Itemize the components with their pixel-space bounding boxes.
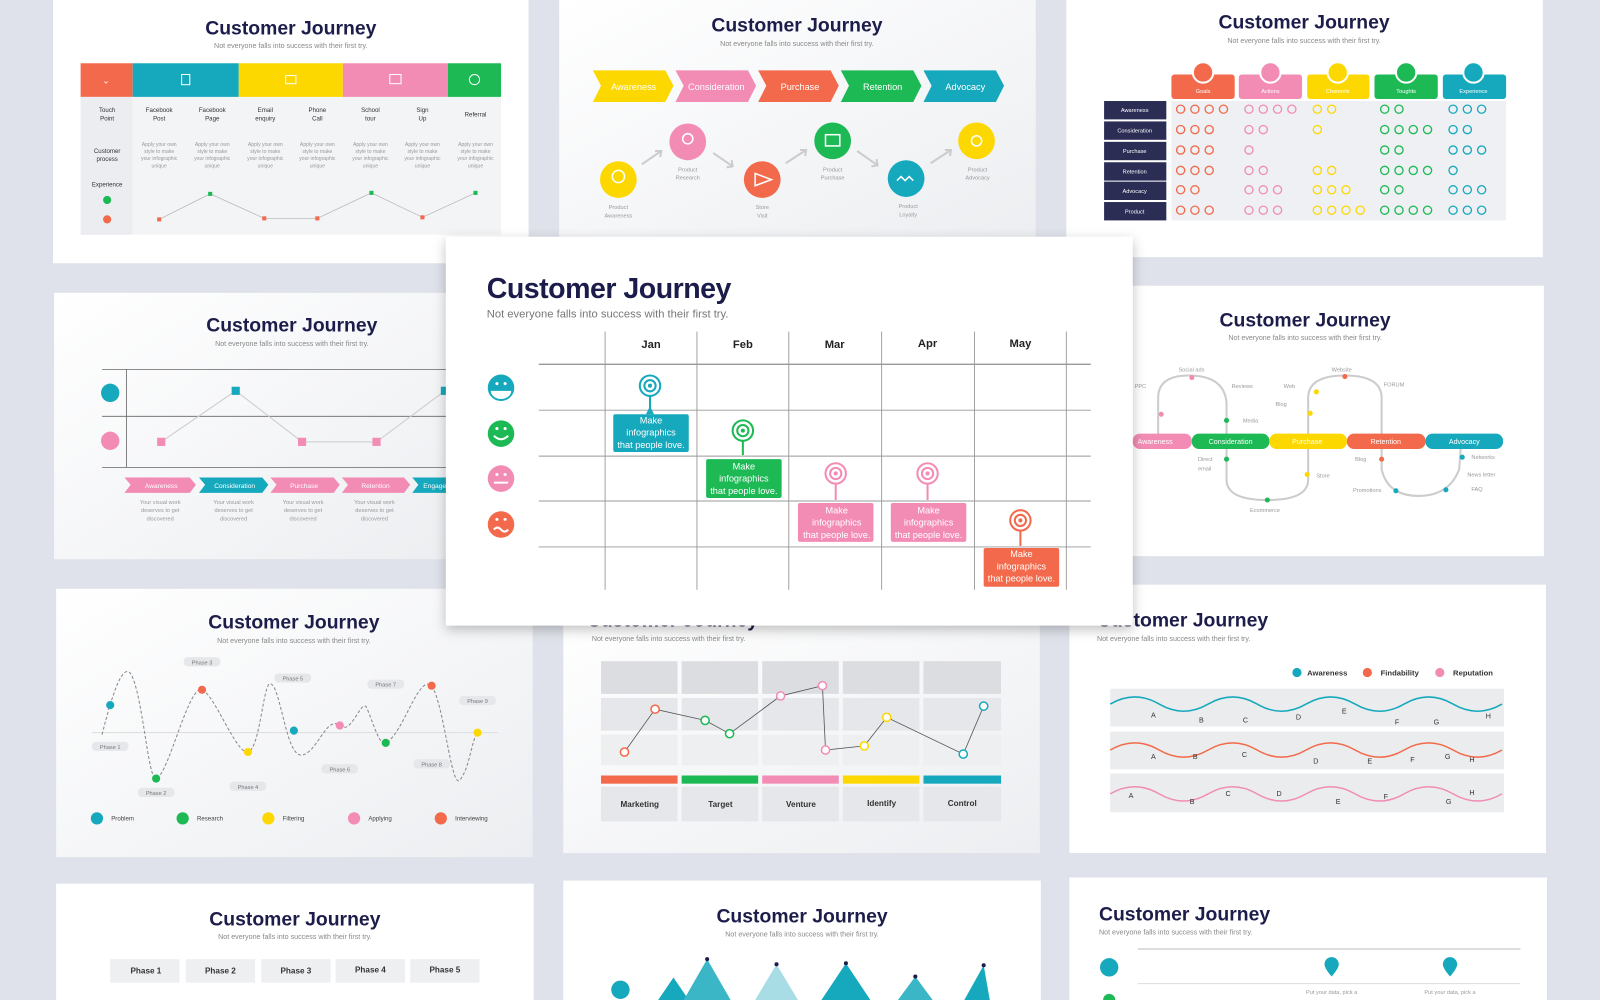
bands: B <box>1199 716 1204 724</box>
slide: smiley line chart: Customer Journey <box>206 315 378 337</box>
slide: loop timeline: Website <box>1332 367 1352 373</box>
callouts: infographics <box>997 561 1047 571</box>
bands: H <box>1486 712 1491 720</box>
slide: loop timeline: Networks <box>1471 455 1495 461</box>
slide: smiley line chart: discovered <box>147 516 174 522</box>
row labels: Phone <box>309 107 327 114</box>
row labels <box>1104 101 1166 220</box>
callouts: that people love. <box>988 574 1055 584</box>
slide: phases bottom left: Phase 2 <box>205 966 236 975</box>
slide: table touch points: unique <box>258 163 273 169</box>
month labels: May <box>1009 338 1032 350</box>
category labels <box>601 776 1001 821</box>
slide: pins bottom right: Put your data, pick a <box>1306 990 1358 996</box>
bands: G <box>1446 798 1452 806</box>
slide: table touch points: Apply your own <box>248 142 283 148</box>
step circles: Purchase <box>821 176 845 182</box>
slide: table touch points: your infographic <box>404 156 441 162</box>
bands: F <box>1395 718 1400 726</box>
chevrons: Purchase <box>290 483 318 490</box>
slide: phases bottom left: Not everyone falls into success with their first try. <box>218 933 372 941</box>
slide: smiley line chart: discovered <box>361 516 388 522</box>
bands: E <box>1367 757 1372 765</box>
callouts: Make <box>917 505 940 515</box>
slide: phases bottom left: Phase 5 <box>429 965 461 974</box>
slide: matrix of circles <box>1066 0 1543 257</box>
bands: G <box>1434 718 1440 726</box>
experience line chart <box>103 191 478 223</box>
slide: loop timeline: Social ads <box>1179 367 1205 373</box>
bands <box>1110 689 1504 812</box>
slide: phase wave: Phase 3 <box>192 660 212 666</box>
slide: table touch points <box>53 0 529 263</box>
slide: phases bottom left: Phase 1 <box>130 966 162 975</box>
legend: Applying <box>368 815 392 822</box>
step circles: Advocacy <box>965 176 990 182</box>
category labels: Control <box>948 799 977 808</box>
callouts: infographics <box>812 518 862 528</box>
slide: phase wave: Phase 4 <box>238 785 258 791</box>
column headers: Actions <box>1261 89 1280 95</box>
bands: B <box>1193 753 1198 761</box>
step circles: Visit <box>757 213 768 219</box>
callouts: that people love. <box>617 440 685 450</box>
header colour bar <box>81 63 501 97</box>
slide: loop timeline: PPC <box>1135 384 1146 390</box>
chevrons: Consideration <box>214 483 255 490</box>
slide: phases bottom left: Phase 3 <box>280 966 312 975</box>
step circles: Product <box>823 167 843 173</box>
month labels: Mar <box>825 339 845 351</box>
timeline bar: Purchase <box>1292 438 1322 446</box>
month labels: Apr <box>918 338 938 350</box>
row labels: Purchase <box>1123 149 1147 155</box>
slide: triangles bottom middle: Not everyone falls into success with their first try. <box>725 931 879 939</box>
slide: smiley line chart: discovered <box>220 516 247 522</box>
row labels: process <box>96 156 118 163</box>
slide: chevron process: Customer Journey <box>711 15 883 37</box>
slide: smiley line chart: deserves to get <box>214 508 253 514</box>
row labels: Experience <box>92 182 123 189</box>
slide: chevron process <box>559 0 1036 237</box>
bands: D <box>1277 790 1282 798</box>
step circles <box>600 122 995 219</box>
bands: A <box>1129 792 1134 800</box>
wave <box>102 671 478 781</box>
slide: table touch points: Not everyone falls into success with their first try. <box>214 42 368 50</box>
slide: phase wave: Phase 8 <box>421 762 442 768</box>
bands: C <box>1242 751 1247 759</box>
bands: H <box>1469 756 1475 764</box>
month labels <box>641 338 1032 351</box>
slide: phase wave: Phase 2 <box>146 791 166 797</box>
slide: table touch points: Apply your own <box>300 142 335 148</box>
slide: featured customer journey grid <box>446 237 1133 626</box>
row labels: Facebook <box>199 107 227 114</box>
row labels: Touch <box>99 107 115 114</box>
timeline bar: Advocacy <box>1449 438 1480 446</box>
slide: table touch points: unique <box>152 163 167 169</box>
icon: smileys <box>488 374 514 538</box>
row labels: Email <box>258 107 273 114</box>
month labels: Feb <box>733 339 753 351</box>
smileys <box>101 384 119 402</box>
row labels: Facebook <box>146 107 174 114</box>
slide: smiley line chart: Your visual work <box>354 500 395 506</box>
slide: table touch points: unique <box>468 163 483 169</box>
bands: G <box>1445 753 1451 761</box>
callouts: Make <box>826 505 848 515</box>
callouts: Make <box>733 461 755 471</box>
legend: Filtering <box>283 815 304 822</box>
grid <box>601 661 1001 765</box>
slide: table touch points: style to make <box>461 149 491 155</box>
step circles: Awareness <box>605 213 632 219</box>
slide: smiley line chart <box>54 293 462 559</box>
line with squares <box>157 387 449 446</box>
slide: table touch points: style to make <box>302 149 333 155</box>
row labels: School <box>361 107 380 114</box>
slide: pins bottom right: Not everyone falls into success with their first try. <box>1099 929 1253 937</box>
bands: H <box>1469 789 1475 797</box>
slide: matrix of circles: Not everyone falls into success with their first try. <box>1227 37 1381 45</box>
slide: matrix of circles: Customer Journey <box>1218 12 1390 34</box>
row labels: Page <box>205 115 220 122</box>
callouts <box>613 376 1059 587</box>
slide: phase wave: Phase 9 <box>467 699 488 705</box>
slide: phase wave: Phase 1 <box>100 745 121 751</box>
step circles: Product <box>609 205 628 211</box>
slide: pins bottom right: Put your data, pick a <box>1424 990 1476 996</box>
slide: phase wave: Customer Journey <box>208 612 380 634</box>
slide: grid line chart <box>563 610 1040 853</box>
circle matrix <box>1171 101 1506 220</box>
bands: E <box>1342 707 1347 715</box>
timeline bar <box>1133 434 1503 449</box>
slide: chevron process: Not everyone falls into success with their first try. <box>720 40 874 48</box>
slide: smiley line chart: deserves to get <box>141 508 180 514</box>
row labels: Awareness <box>1121 108 1149 114</box>
chevrons: Retention <box>361 483 390 490</box>
slide: loop timeline: Store <box>1316 474 1330 480</box>
bands: E <box>1336 798 1341 806</box>
legend: Interviewing <box>455 815 488 822</box>
slide: loop timeline: Web <box>1284 384 1295 390</box>
slide: grid line chart: Customer Journey <box>587 610 758 632</box>
slide: phases bottom left: Customer Journey <box>209 909 381 931</box>
slide: pins bottom right <box>1069 878 1547 1000</box>
slide: pins bottom right: Customer Journey <box>1099 903 1270 925</box>
bands: D <box>1313 757 1318 765</box>
slide: table touch points: Apply your own <box>405 142 440 148</box>
category labels: Venture <box>786 800 816 809</box>
slide: table touch points: your infographic <box>457 156 494 162</box>
slide: phases bottom left <box>56 884 534 1000</box>
chevrons: Retention <box>863 82 902 92</box>
chevrons: Awareness <box>611 82 657 92</box>
callouts: that people love. <box>710 486 778 496</box>
callouts: that people love. <box>803 530 870 540</box>
slide: table touch points: unique <box>363 163 378 169</box>
bands: D <box>1296 713 1301 721</box>
slide: loop timeline: Reviews <box>1232 384 1253 390</box>
slide: phase wave: Not everyone falls into success with their first try. <box>217 637 371 645</box>
slide: table touch points: your infographic <box>299 156 336 162</box>
title: Customer Journey <box>205 18 377 40</box>
category labels: Identify <box>867 799 897 808</box>
slide: table touch points: unique <box>205 163 220 169</box>
slide: table touch points: unique <box>310 163 325 169</box>
slide: phase wave: Phase 7 <box>375 683 396 689</box>
loops <box>1158 376 1461 500</box>
slide: smiley line chart: Your visual work <box>283 500 324 506</box>
slide: phase wave <box>56 589 533 857</box>
chevrons: Purchase <box>781 82 819 92</box>
row labels: tour <box>365 115 376 122</box>
bands: A <box>1151 711 1156 719</box>
slide: triangles bottom middle <box>563 881 1041 1000</box>
callouts: that people love. <box>895 530 962 540</box>
slide: table touch points: your infographic <box>141 156 178 162</box>
timeline bar: Retention <box>1370 438 1401 446</box>
slide: table touch points: your infographic <box>247 156 284 162</box>
chevrons <box>593 70 1004 102</box>
step circles: Product <box>898 204 918 210</box>
slide: table touch points: Apply your own <box>353 142 388 148</box>
slide: table touch points: style to make <box>144 149 174 155</box>
legend <box>1292 668 1493 678</box>
callouts: infographics <box>904 518 954 528</box>
row labels: Sign <box>416 107 429 114</box>
column headers: Toughts <box>1396 89 1416 95</box>
row labels: Advocacy <box>1123 189 1147 195</box>
callouts: infographics <box>719 474 769 484</box>
grid lines <box>539 332 1091 590</box>
slide: loop timeline: Not everyone falls into success with their first try. <box>1228 334 1382 342</box>
slide: loop timeline: Promotions <box>1353 488 1382 494</box>
slide: featured customer journey grid: Not everyone falls into success with their first try. <box>487 308 728 320</box>
slide: table touch points: Apply your own <box>142 142 177 148</box>
slide: loop timeline: Blog <box>1355 457 1366 463</box>
chevrons: Consideration <box>688 82 745 92</box>
column headers: Channels <box>1326 89 1350 95</box>
bands: C <box>1243 716 1248 724</box>
slide: smiley line chart: Your visual work <box>213 500 254 506</box>
slide: loop timeline: News letter <box>1467 473 1496 479</box>
bands: F <box>1410 756 1415 764</box>
slide: phases bottom left: Phase 4 <box>355 965 386 974</box>
slide: table touch points: Apply your own <box>458 142 493 148</box>
slide: smiley line chart: Not everyone falls into success with their first try. <box>215 340 369 348</box>
row labels: Call <box>312 115 323 122</box>
chevrons: Engage <box>423 483 446 490</box>
slide: table touch points: your infographic <box>194 156 231 162</box>
step circles: Store <box>756 205 769 211</box>
legend: Findability <box>1381 669 1420 678</box>
row labels: Retention <box>1123 169 1147 175</box>
month labels: Jan <box>641 339 661 351</box>
slide: phase wave: Phase 5 <box>283 677 303 683</box>
timeline bar: Consideration <box>1209 438 1253 446</box>
callouts: infographics <box>626 428 676 438</box>
header colour bar: ⌄ <box>102 76 110 86</box>
slide: wave bands <box>1069 585 1546 853</box>
slide: wave bands: Customer Journey <box>1097 610 1268 632</box>
legend: Research <box>197 815 223 822</box>
step circles: Product <box>678 167 698 173</box>
bands: C <box>1226 790 1231 798</box>
bands: F <box>1384 793 1389 801</box>
row labels: Product <box>1125 209 1145 215</box>
legend <box>91 812 488 824</box>
row labels: Point <box>100 115 114 122</box>
slide: table touch points: style to make <box>197 149 227 155</box>
chevrons: Awareness <box>145 483 178 490</box>
legend: Reputation <box>1453 669 1493 678</box>
row labels <box>92 107 486 189</box>
slide: smiley line chart: Your visual work <box>140 500 181 506</box>
legend: Problem <box>111 815 134 822</box>
slide: triangles bottom middle: Customer Journey <box>716 905 888 927</box>
row labels: Customer <box>94 148 120 155</box>
slide: loop timeline: Direct <box>1198 457 1213 463</box>
slide: loop timeline <box>1122 286 1544 556</box>
bands: A <box>1151 753 1156 761</box>
slide: grid line chart: Not everyone falls into success with their first try. <box>592 635 745 643</box>
slide: smiley line chart: deserves to get <box>284 508 323 514</box>
slide: loop timeline: Media <box>1243 418 1259 424</box>
chevrons: Advocacy <box>945 82 986 92</box>
category labels: Marketing <box>621 800 659 809</box>
line chart <box>620 682 988 758</box>
slide: loop timeline: Customer Journey <box>1220 310 1391 332</box>
slide: table touch points: style to make <box>250 149 280 155</box>
legend: Awareness <box>1307 669 1347 678</box>
slide: loop timeline: FAQ <box>1471 487 1483 493</box>
timeline bar: Awareness <box>1138 438 1173 446</box>
slide: smiley line chart: discovered <box>289 516 317 522</box>
step circles: Product <box>968 167 988 173</box>
column headers <box>1171 62 1506 99</box>
title: Customer Journey <box>487 273 732 305</box>
slide: smiley line chart: deserves to get <box>355 508 394 514</box>
step circles: Research <box>676 176 700 182</box>
row labels: Post <box>153 115 166 122</box>
callouts: Make <box>1010 549 1033 559</box>
slide: phase wave: Phase 6 <box>329 767 350 773</box>
slide: wave bands: Not everyone falls into success with their first try. <box>1097 635 1250 643</box>
slide: table touch points: style to make <box>407 149 438 155</box>
slide: loop timeline: Blog <box>1276 402 1287 408</box>
row labels: enquiry <box>255 115 276 122</box>
slide: loop timeline: FORUM <box>1384 383 1405 389</box>
row labels: Consideration <box>1117 129 1152 135</box>
slide: table touch points: your infographic <box>352 156 389 162</box>
column headers: Experience <box>1459 89 1488 95</box>
slide: table touch points: style to make <box>355 149 386 155</box>
callouts: Make <box>640 415 662 425</box>
row labels: Referral <box>465 111 486 118</box>
chevrons <box>124 478 449 493</box>
column headers: Goals <box>1196 89 1211 95</box>
slide: loop timeline: email <box>1198 466 1211 472</box>
slide: table touch points: unique <box>415 163 430 169</box>
category labels: Target <box>708 800 733 809</box>
bands: B <box>1190 798 1195 806</box>
step circles: Loyalty <box>899 212 917 218</box>
slide: table touch points: Apply your own <box>195 142 230 148</box>
slide: loop timeline: Ecommerce <box>1250 508 1280 514</box>
row labels: Up <box>419 115 427 122</box>
